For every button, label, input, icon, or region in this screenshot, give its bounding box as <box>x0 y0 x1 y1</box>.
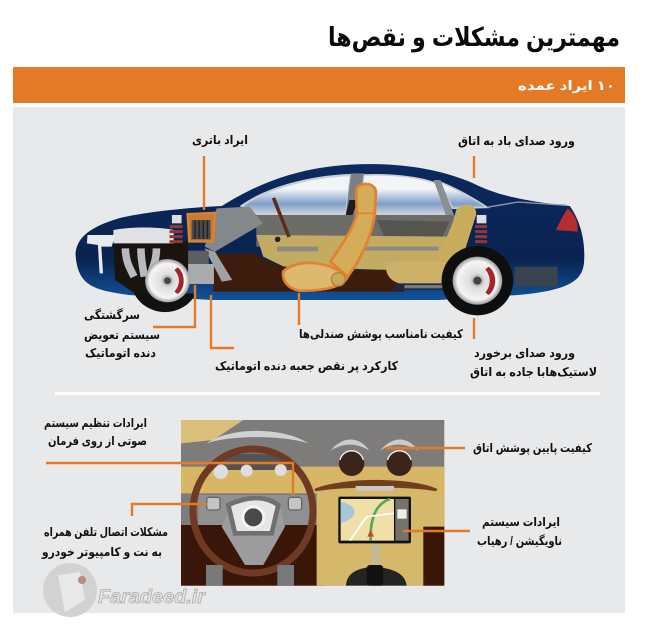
rear light and grille <box>556 208 578 232</box>
steering wheel <box>193 449 313 573</box>
header band: ۱۰ ایراد عمده <box>518 78 615 93</box>
label: voice control: صوتی از روی فرمان <box>48 434 147 449</box>
dashboard illustration <box>181 420 444 586</box>
label: navigation <box>477 515 562 549</box>
console and shifter <box>372 545 380 553</box>
panel: background <box>13 107 625 613</box>
label: voice control <box>44 416 147 449</box>
firewall and dash <box>205 207 263 252</box>
label: phone connection <box>41 525 168 560</box>
label: gearbox: کارکرد پر نقص جعبه دنده اتوماتیک <box>215 359 398 374</box>
driver seat <box>283 184 376 291</box>
car illustration <box>75 164 584 315</box>
battery <box>187 213 215 242</box>
car body <box>75 164 584 300</box>
label: transmission confusion: سیستم تعویض <box>84 328 160 343</box>
label: voice control: ایرادات تنظیم سیستم <box>44 416 147 430</box>
label: phone connection: به نت و کامپیوتر خودرو <box>41 545 162 560</box>
gearbox <box>188 251 214 284</box>
label: seat cover: کیفیت نامناسب پوشش صندلی‌ها <box>299 327 463 342</box>
label: road noise <box>470 346 597 379</box>
windows <box>242 175 351 215</box>
watermark <box>43 563 207 617</box>
label: wind noise: ورود صدای باد به اتاق <box>458 134 575 149</box>
gauges <box>213 464 287 479</box>
front wheel <box>134 259 196 312</box>
header band <box>13 67 625 103</box>
watermark: Faradeed.ir <box>98 587 207 608</box>
air vents <box>331 440 418 476</box>
floor <box>213 253 404 292</box>
suspension springs <box>170 227 487 242</box>
interior door <box>256 215 460 247</box>
rear seat <box>434 205 476 263</box>
pedals <box>206 565 223 586</box>
label: road noise: ورود صدای برخورد <box>474 346 575 361</box>
label: transmission confusion: سرگشتگی <box>84 308 140 322</box>
label: transmission confusion: دنده اتوماتیک <box>85 346 156 361</box>
engine bay <box>113 242 188 297</box>
label: navigation: ایرادات سیستم <box>482 515 560 529</box>
label: road noise: لاستیک‌هابا جاده به اتاق <box>470 365 597 379</box>
label: transmission confusion <box>84 308 160 361</box>
rear wheel <box>442 246 513 315</box>
callout lines <box>46 156 474 531</box>
label: phone connection: مشکلات اتصال تلفن همراه <box>44 525 168 539</box>
navigation screen <box>338 497 411 543</box>
label: battery: ایراد باتری <box>192 133 248 147</box>
label: cabin cover: کیفیت پایین پوشش اتاق <box>473 441 592 456</box>
label: navigation: ناویگیشن / رهیاب <box>477 534 562 549</box>
